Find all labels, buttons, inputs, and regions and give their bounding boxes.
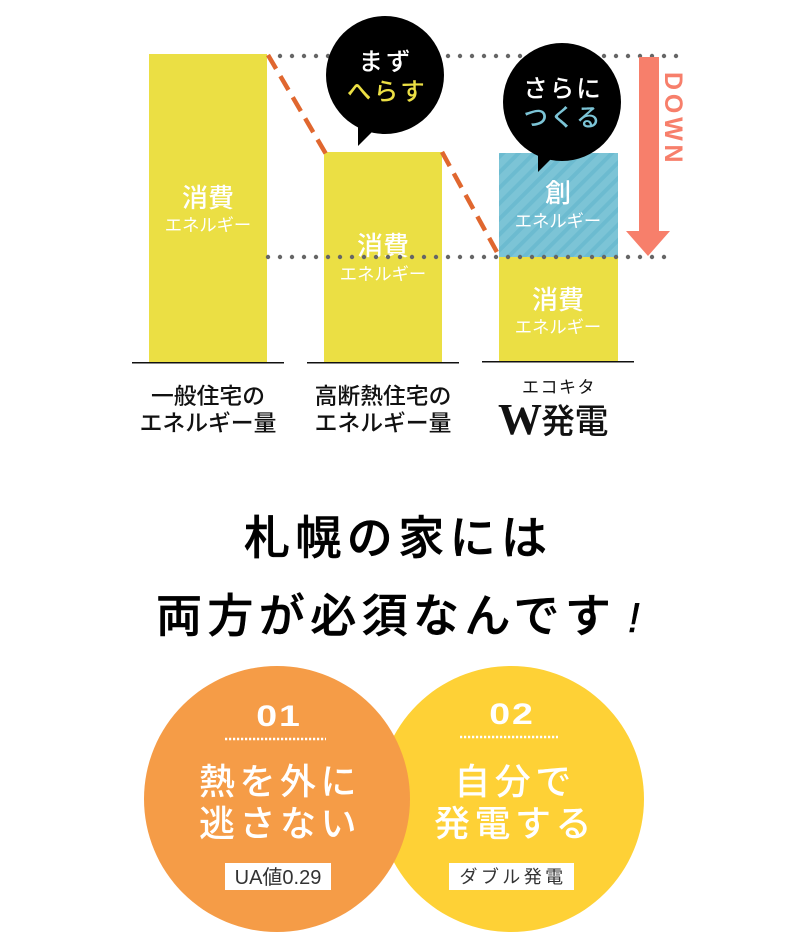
bar label: Ecokita W generation logo: W	[498, 395, 542, 444]
bar: high insulation house consumption: エネルギー	[340, 264, 426, 284]
heading: 札幌の家には	[244, 512, 552, 564]
speech bubble: reduce first: へらす	[347, 79, 427, 106]
tag: double generation	[449, 863, 574, 890]
bar label: Ecokita W generation logo	[498, 378, 608, 444]
bar chart: energy comparison	[132, 16, 687, 364]
label: DOWN: DOWN	[659, 72, 687, 166]
circle 02: generate power: 自分で	[454, 761, 576, 802]
speech bubble: create more: つくる	[523, 105, 603, 132]
circle 02: generate power: 発電する	[434, 803, 596, 844]
arrow: down	[626, 57, 670, 256]
bar: W power generation stacked: エネルギー	[515, 211, 601, 231]
bar label: Ecokita W generation logo: 発電	[541, 403, 608, 441]
heading: !	[628, 594, 645, 641]
speech bubble: reduce first	[326, 16, 444, 146]
dashed slope lines	[268, 55, 498, 254]
tag: double generation: ダブル発電	[460, 866, 566, 887]
bar: W power generation stacked	[499, 153, 618, 361]
dotted reference lines	[268, 56, 678, 257]
tag: UA value: UA値0.29	[235, 866, 321, 889]
bar label: general house: エネルギー量	[140, 410, 276, 436]
circle 02: generate power: 02	[489, 697, 535, 731]
bar label: high insulation house: エネルギー量	[315, 410, 451, 436]
bar: W power generation stacked: 消費	[532, 285, 584, 315]
circle 01: keep heat in: 01	[256, 699, 302, 733]
bar label: general house	[140, 383, 276, 436]
baselines	[132, 361, 634, 364]
circle 02: generate power	[378, 666, 644, 932]
circle 01: keep heat in	[144, 666, 410, 932]
heading	[156, 512, 645, 642]
speech bubble: create more	[503, 43, 621, 172]
tag: UA value	[225, 863, 331, 890]
circle 01: keep heat in: 熱を外に	[199, 761, 361, 802]
bar label: high insulation house	[315, 383, 451, 436]
heading: 両方が必須なんです	[156, 590, 616, 642]
bar: high insulation house consumption: 消費	[357, 231, 409, 261]
bar label: high insulation house: 高断熱住宅の	[315, 383, 451, 409]
speech bubble: create more: さらに	[523, 76, 603, 103]
bar: W power generation stacked: エネルギー	[515, 317, 601, 337]
bar: general house consumption	[149, 54, 267, 362]
bar: general house consumption: 消費	[182, 183, 234, 213]
circle 01: keep heat in: 逃さない	[199, 803, 361, 844]
speech bubble: reduce first: まず	[358, 48, 414, 76]
bar label: Ecokita W generation logo: エコキタ	[522, 378, 596, 397]
bar: high insulation house consumption	[324, 152, 442, 362]
bar: general house consumption: エネルギー	[165, 215, 251, 235]
bar: W power generation stacked: 創	[545, 178, 571, 208]
bar label: general house: 一般住宅の	[151, 383, 265, 409]
